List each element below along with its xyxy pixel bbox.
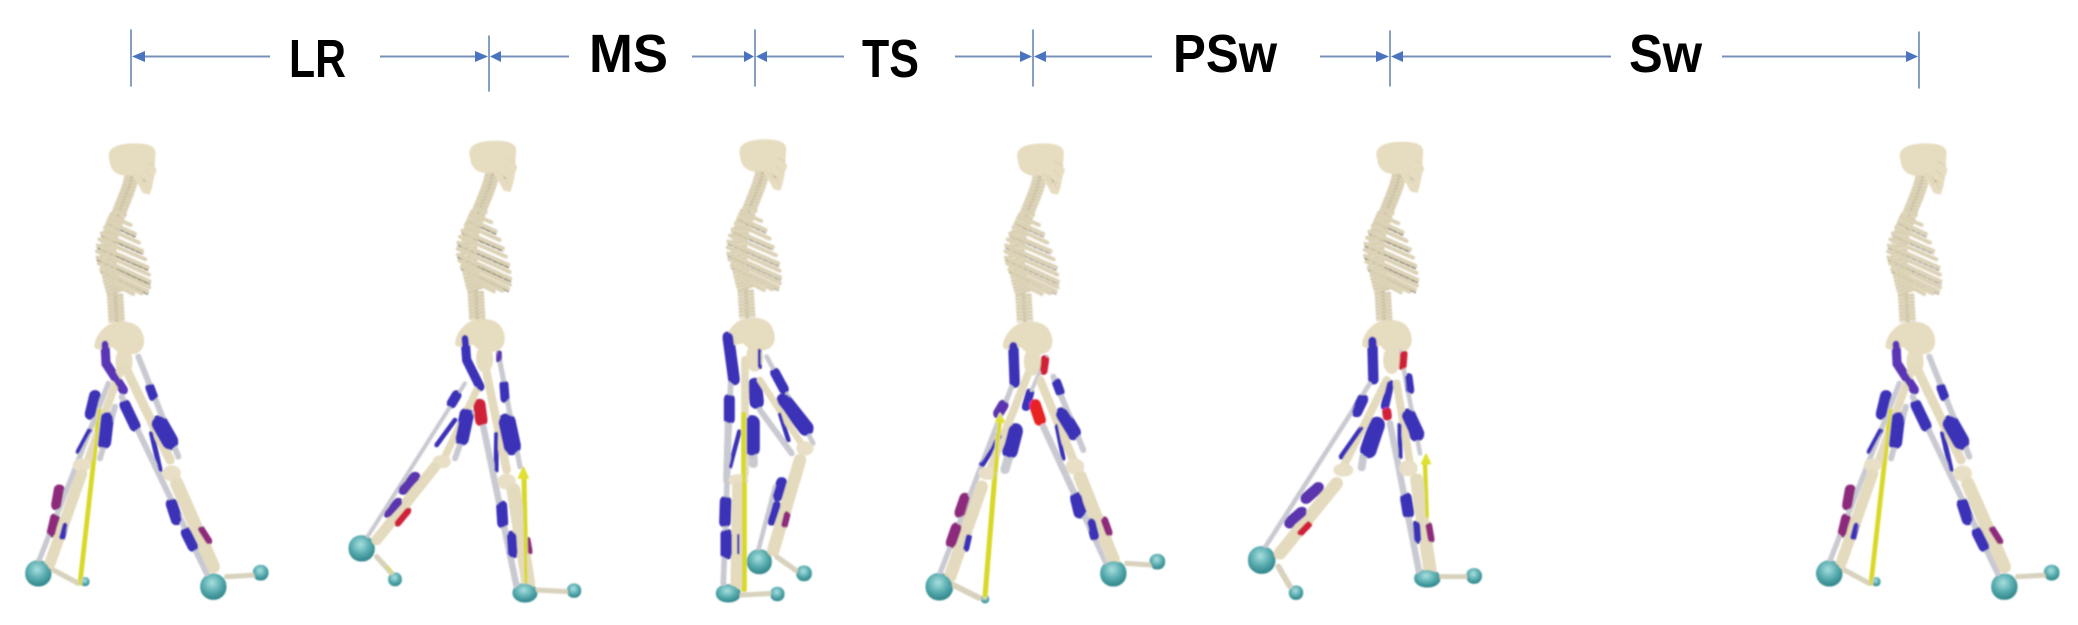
phase LR: LR [289,29,346,89]
figure 2: mid stance pose [349,141,581,602]
boundary ticks [131,30,1919,91]
phase MS [490,24,754,84]
phase MS: MS [589,24,668,84]
phase PSw: PSw [1173,24,1278,84]
figure 1: loading response pose [26,144,268,599]
figure 6: repeated loading response pose [1817,144,2059,599]
phase Sw: Sw [1629,24,1703,84]
phase PSw [1034,24,1389,84]
phase TS: TS [862,29,919,89]
phase LR [132,29,488,89]
figure 4: pre-swing pose [926,144,1165,603]
phase Sw [1391,24,1918,84]
phase TS [756,29,1032,89]
phase ruler [131,24,1919,91]
figure 5: swing start pose [1248,142,1481,599]
skeleton figures [26,140,2059,603]
figure 3: terminal stance pose [716,140,813,602]
